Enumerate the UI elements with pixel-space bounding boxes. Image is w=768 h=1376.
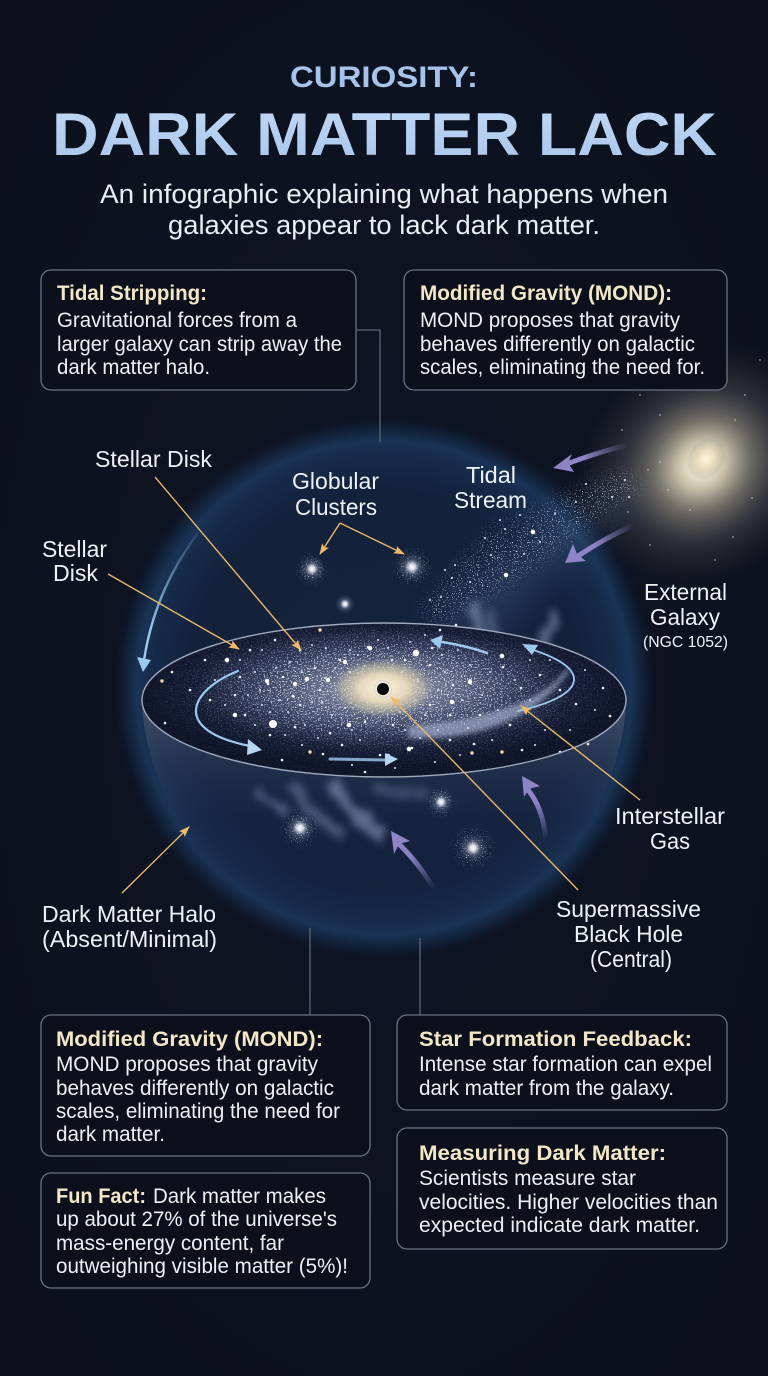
label: interstellar gas: Interstellar xyxy=(615,803,725,829)
panel: star formation feedback: dark matter from the galaxy. xyxy=(419,1077,674,1100)
subtitle: An infographic explaining what happens when xyxy=(100,179,668,209)
panel: measuring dark matter: Measuring Dark Matter: xyxy=(419,1142,666,1165)
label: interstellar gas: Gas xyxy=(650,828,690,854)
panel: modified gravity bottom: scales, eliminating the need for xyxy=(56,1100,340,1123)
panel: modified gravity top: Modified Gravity (MOND): xyxy=(420,282,672,305)
globular clusters xyxy=(270,540,500,875)
dark matter halo sphere xyxy=(112,416,656,960)
panel: tidal stripping xyxy=(41,270,356,390)
title: CURIOSITY: xyxy=(290,61,478,94)
panel: modified gravity bottom xyxy=(41,1015,370,1156)
panel: tidal stripping: Tidal Stripping: xyxy=(57,282,207,305)
label: stellar disk left xyxy=(42,536,107,586)
galactic core and supermassive black hole xyxy=(331,658,435,718)
orange label leader arrows xyxy=(108,477,640,893)
panel: modified gravity top: behaves differently on galactic xyxy=(420,333,695,356)
panel: star formation feedback xyxy=(397,1015,727,1110)
subtitle: galaxies appear to lack dark matter. xyxy=(168,210,600,240)
label: globular clusters: Globular xyxy=(292,468,379,494)
label: stellar disk left: Stellar xyxy=(42,536,107,562)
panel: star formation feedback: Intense star formation can expel xyxy=(419,1053,712,1076)
purple inflow arrows xyxy=(391,445,634,889)
title xyxy=(52,61,717,168)
label: external galaxy: Galaxy xyxy=(650,604,720,630)
panel: tidal stripping: Gravitational forces from a xyxy=(57,309,297,332)
panel: fun fact: mass-energy content, far xyxy=(56,1232,284,1255)
label: dark matter halo: (Absent/Minimal) xyxy=(42,926,217,952)
panel: fun fact xyxy=(41,1173,370,1288)
panel: fun fact: Dark matter makes xyxy=(153,1185,326,1208)
label: tidal stream: Stream xyxy=(454,487,527,513)
connector lines xyxy=(310,330,420,1015)
subtitle xyxy=(100,179,668,240)
interstellar gas wisps xyxy=(256,605,552,838)
disk rim xyxy=(142,623,626,777)
label: supermassive black hole: (Central) xyxy=(590,946,672,972)
panel: modified gravity top: MOND proposes that gravity xyxy=(420,309,680,332)
panel: tidal stripping: larger galaxy can strip away the xyxy=(57,333,342,356)
panel: fun fact: outweighing visible matter (5%)! xyxy=(56,1255,348,1278)
label: dark matter halo xyxy=(42,901,217,952)
label: interstellar gas xyxy=(615,803,725,854)
panel: modified gravity bottom: Modified Gravity (MOND): xyxy=(56,1028,323,1051)
label: supermassive black hole xyxy=(556,896,701,972)
label: supermassive black hole: Black Hole xyxy=(574,921,683,947)
label: tidal stream: Tidal xyxy=(466,462,516,488)
label: globular clusters: Clusters xyxy=(295,494,377,520)
disk bright stars xyxy=(162,625,610,772)
external galaxy NGC 1052 xyxy=(523,288,768,642)
panel: fun fact: up about 27% of the universe's xyxy=(56,1208,337,1231)
label: stellar disk left: Disk xyxy=(53,560,98,586)
label: supermassive black hole: Supermassive xyxy=(556,896,701,922)
galaxy disk xyxy=(142,623,626,777)
spiral gas band on disk xyxy=(410,670,568,736)
panel: modified gravity top xyxy=(404,270,727,390)
panel: star formation feedback: Star Formation Feedback: xyxy=(419,1028,692,1051)
label: external galaxy xyxy=(643,579,728,651)
label: dark matter halo: Dark Matter Halo xyxy=(42,901,216,927)
panel: modified gravity bottom: dark matter. xyxy=(56,1123,165,1146)
blue rotation arrows xyxy=(137,533,574,766)
panel: measuring dark matter: expected indicate dark matter. xyxy=(419,1214,700,1237)
panel: measuring dark matter: Scientists measure star xyxy=(419,1167,636,1190)
label: tidal stream xyxy=(454,462,527,513)
panel: fun fact: Fun Fact: xyxy=(56,1185,146,1208)
panel: measuring dark matter xyxy=(397,1128,727,1249)
label: stellar disk upper: Stellar Disk xyxy=(95,446,212,472)
label: globular clusters xyxy=(292,468,379,520)
panel: modified gravity top: scales, eliminating the need for. xyxy=(420,356,705,379)
panel: modified gravity bottom: MOND proposes that gravity xyxy=(56,1053,318,1076)
label: external galaxy: (NGC 1052) xyxy=(643,634,728,651)
title: DARK MATTER LACK xyxy=(52,101,717,168)
panel: tidal stripping: dark matter halo. xyxy=(57,356,210,379)
panel: modified gravity bottom: behaves differently on galactic xyxy=(56,1077,334,1100)
tidal stream xyxy=(412,460,648,633)
fine star field xyxy=(142,623,626,777)
panel: measuring dark matter: velocities. Higher velocities than xyxy=(419,1191,718,1214)
label: external galaxy: External xyxy=(644,579,727,605)
